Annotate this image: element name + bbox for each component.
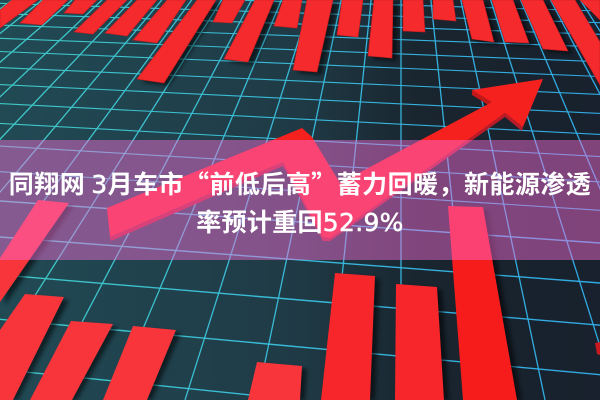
bars: top row [0, 0, 600, 85]
title text [9, 165, 591, 239]
title band [0, 140, 600, 260]
bars: bottom row [0, 200, 600, 400]
title text: 同翔网 3月车市“前低后高”蓄力回暖，新能源渗透 [9, 165, 591, 201]
rising arrow [107, 79, 543, 241]
title text: 率预计重回52.9% [196, 203, 404, 239]
